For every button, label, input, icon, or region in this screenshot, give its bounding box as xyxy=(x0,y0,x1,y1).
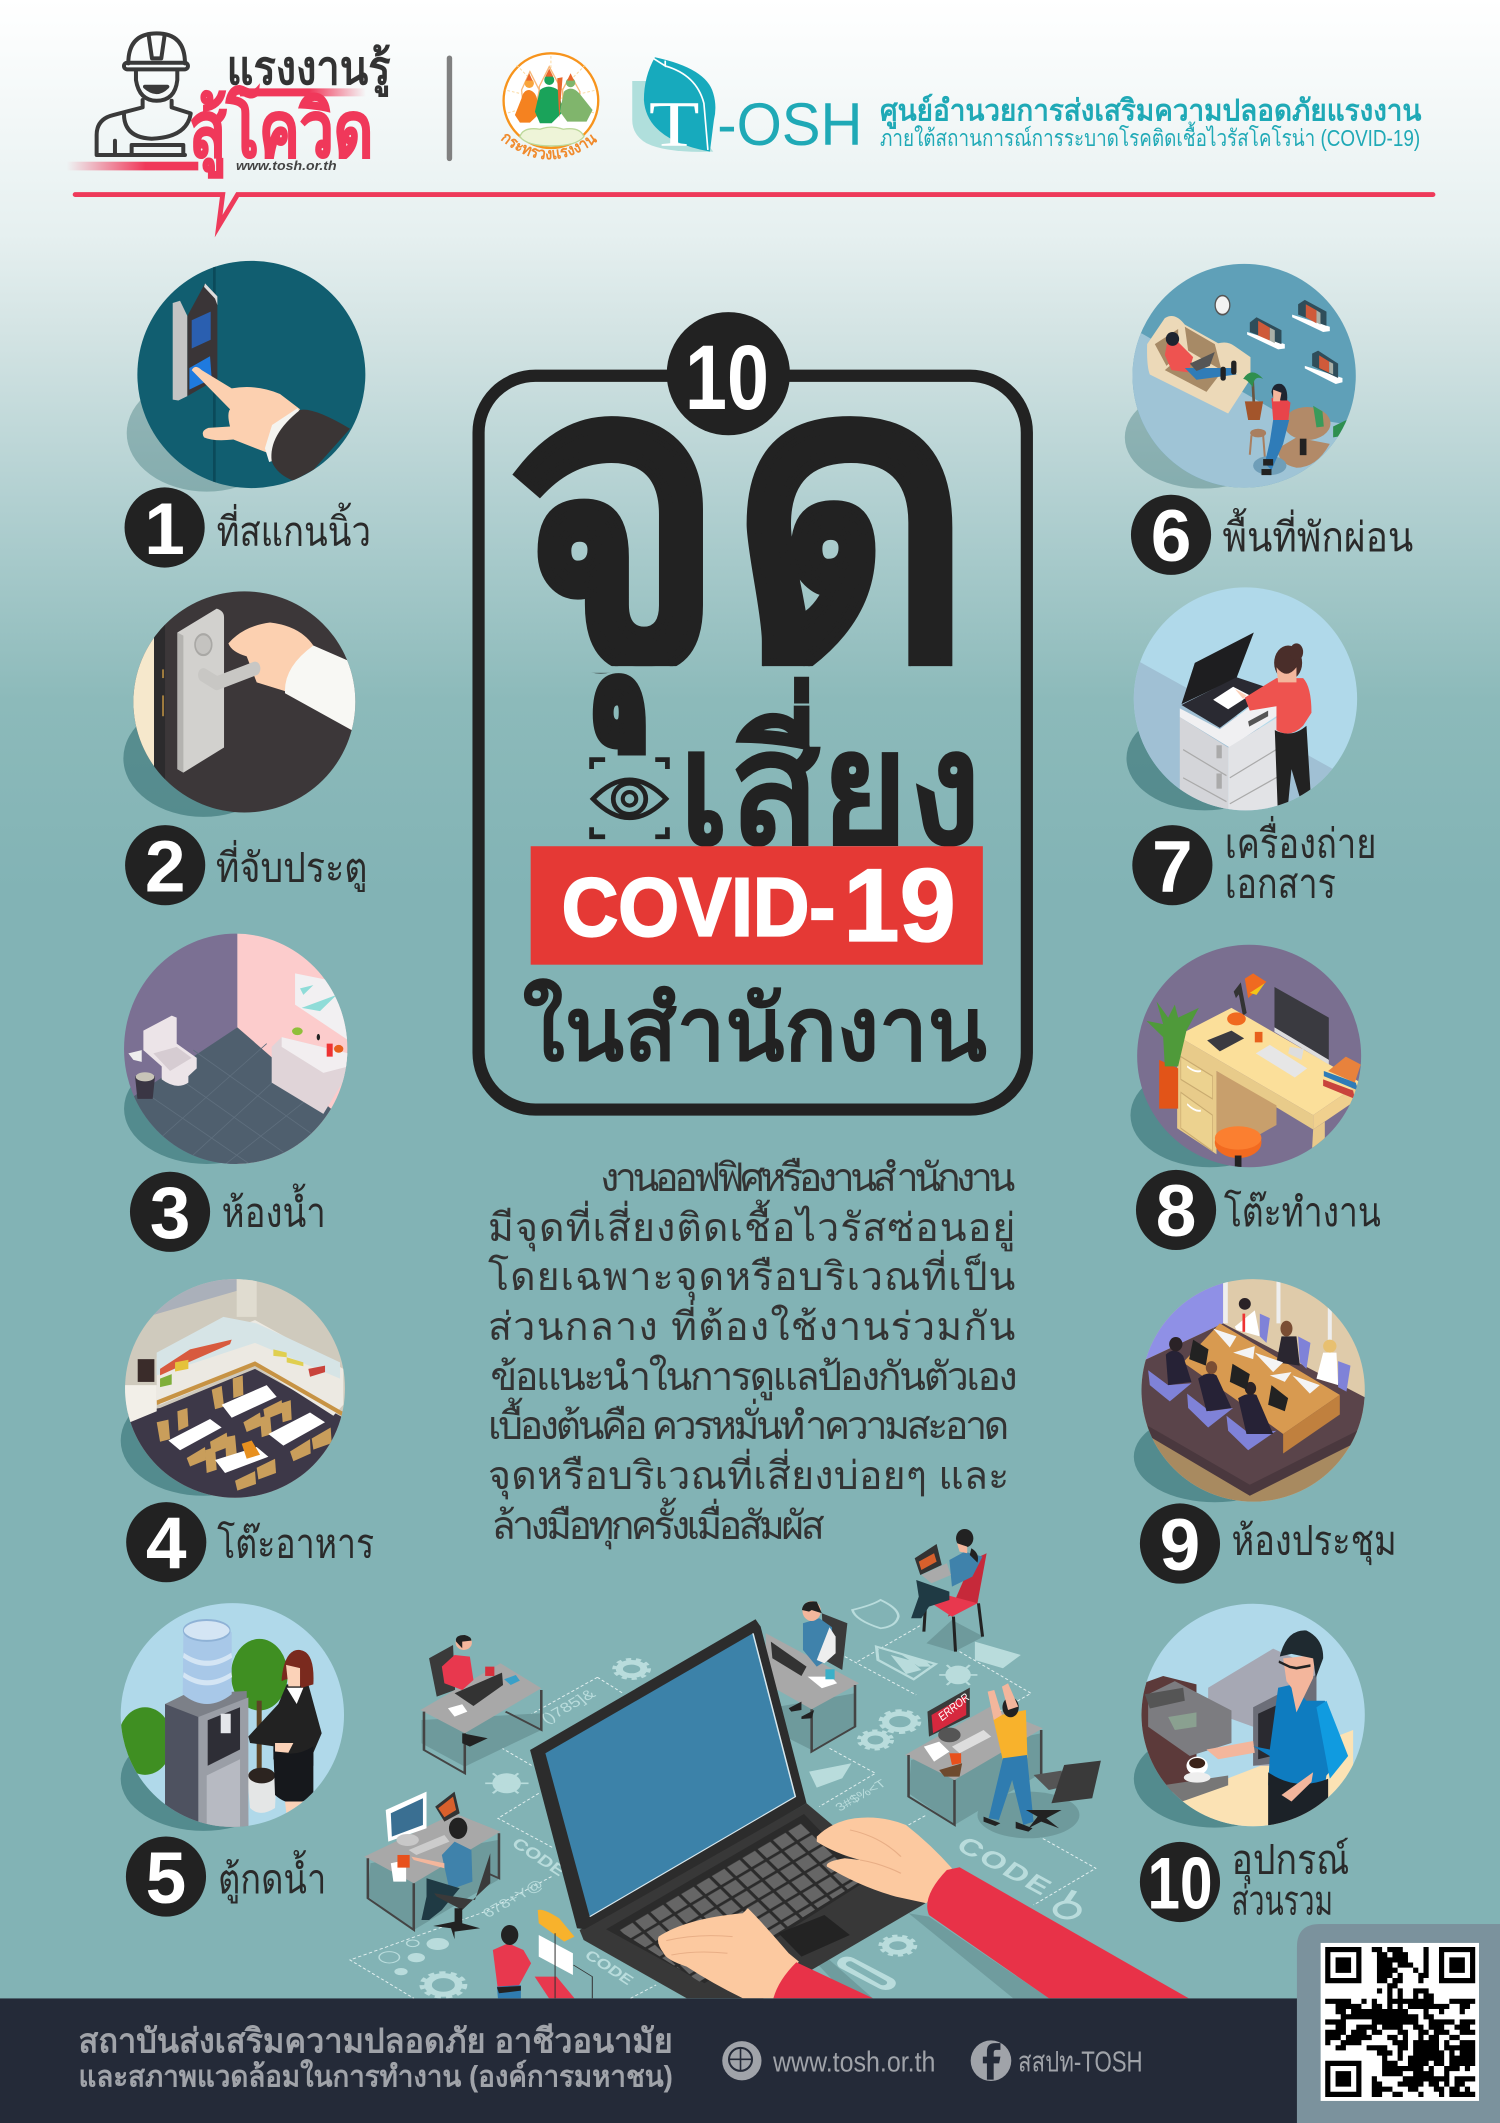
paragraph xyxy=(488,1156,1018,1550)
logo: T-OSH xyxy=(632,57,863,161)
number badge 6 xyxy=(1131,495,1211,577)
code texts xyxy=(480,1686,1057,1988)
logo: workers fight covid xyxy=(67,33,391,179)
big title: จุด xyxy=(512,416,952,756)
code texts: CODE xyxy=(581,1947,637,1988)
number badge 2 xyxy=(125,825,205,908)
code texts: 3#$%<T xyxy=(832,1777,889,1814)
desk worker: red chair xyxy=(911,1529,987,1652)
label 3: ห้องน้ำ xyxy=(222,1184,326,1236)
logo url: www.tosh.or.th xyxy=(236,159,337,173)
organisation name: และสภาพแวดล้อมในการทำงาน (องค์การมหาชน) xyxy=(79,2058,673,2093)
facebook name: สสปท-TOSH xyxy=(1018,2047,1143,2079)
icon: globe xyxy=(722,2041,762,2080)
shadow of arm xyxy=(817,1913,1049,1998)
label 10 xyxy=(1232,1836,1349,1923)
panel: 6 rest area xyxy=(1100,240,1420,577)
desk worker: error screen xyxy=(905,1683,1101,1838)
label 10: อุปกรณ์ xyxy=(1232,1836,1349,1884)
desk worker: red shirt xyxy=(420,1635,541,1773)
number badge 9: 9 xyxy=(1160,1505,1200,1586)
number badge 6: 6 xyxy=(1151,496,1191,577)
red speech line xyxy=(75,195,1433,226)
label 7: เอกสาร xyxy=(1225,860,1336,906)
panel: 2 door handle xyxy=(123,591,365,906)
illustration: photocopier xyxy=(1126,588,1358,810)
title: เสี่ยง: เสี่ยง xyxy=(678,677,981,878)
label 7: เครื่องถ่าย xyxy=(1225,816,1377,867)
red band COVID-19: COVID- xyxy=(562,862,835,954)
panel: 9 meeting room xyxy=(1134,1271,1397,1586)
laptop xyxy=(530,1619,925,1998)
title block xyxy=(479,278,1027,1110)
paragraph: ข้อแนะนำในการดูแลป้องกันตัวเอง xyxy=(490,1355,1018,1400)
footer bar xyxy=(0,1998,1300,2123)
organisation name: สถาบันส่งเสริมความปลอดภัย อาชีวอนามัย xyxy=(79,2023,673,2061)
circle number 10: 10 xyxy=(685,326,769,429)
QR panel xyxy=(1297,1924,1500,2123)
label 9: ห้องประชุม xyxy=(1232,1517,1397,1565)
label 8: โต๊ะทำงาน xyxy=(1224,1189,1381,1235)
panel: 10 shared appliances xyxy=(1134,1597,1373,1924)
illustration: door handle xyxy=(123,591,356,817)
paragraph: โดยเฉพาะจุดหรือบริเวณที่เป็น xyxy=(488,1249,1015,1301)
pale icons: gears, bug, mail, shield xyxy=(379,1600,1079,1997)
left hand xyxy=(658,1908,873,1998)
desk worker: error screen: ERROR xyxy=(937,1691,972,1724)
number badge 4 xyxy=(126,1502,206,1585)
number badge 7 xyxy=(1132,825,1212,908)
red band COVID-19 xyxy=(531,846,983,965)
title frame xyxy=(479,376,1027,1110)
big title: จุด: จุด xyxy=(505,278,975,783)
illustration: people coding around laptop xyxy=(350,1529,1189,1998)
paragraph: ล้างมือทุกครั้งเมื่อสัมผัส xyxy=(492,1497,825,1550)
emblem: ministry of labour: กระทรวงแรงงาน xyxy=(500,134,598,160)
number badge 8 xyxy=(1136,1170,1216,1252)
organisation name xyxy=(79,2023,673,2093)
illustration: rest area xyxy=(1124,264,1356,488)
red ribbon strips xyxy=(67,88,366,170)
icon: worker with helmet xyxy=(97,33,191,155)
number badge 1: 1 xyxy=(144,489,185,570)
header title line 1: ศูนย์อำนวยการส่งเสริมความปลอดภัยแรงงาน xyxy=(880,94,1422,130)
illustration: water dispenser xyxy=(120,1603,344,1831)
paragraph: จุดหรือบริเวณที่เสี่ยงบ่อยๆ และ xyxy=(488,1448,1009,1500)
code texts: CODE xyxy=(950,1832,1057,1900)
label 7 xyxy=(1225,816,1377,906)
icon: facebook xyxy=(971,2040,1011,2081)
icon: eye scan xyxy=(592,760,667,837)
divider xyxy=(447,56,452,161)
illustration: coffee machine xyxy=(1134,1597,1373,1837)
illustration: meeting room xyxy=(1134,1271,1373,1506)
emblem: ministry of labour xyxy=(500,52,600,160)
logo: T-OSH: -OSH xyxy=(717,90,863,158)
red band COVID-19: 19 xyxy=(843,848,956,964)
panel: 4 canteen tables xyxy=(120,1271,374,1585)
illustration: fingerprint scanner xyxy=(126,260,366,492)
paragraph: งานออฟฟิศหรืองานสำนักงาน xyxy=(600,1156,1015,1200)
label 6: พื้นที่พักผ่อน xyxy=(1222,508,1413,560)
code texts: 678+Y@ xyxy=(480,1877,547,1921)
panel: 5 water dispenser xyxy=(118,1597,353,1919)
number badge 3: 3 xyxy=(150,1173,190,1254)
number badge 1 xyxy=(125,487,205,570)
panel: 7 photocopier xyxy=(1100,578,1420,908)
logo: T-OSH: T xyxy=(649,89,700,161)
big title: จุด: จุ xyxy=(500,278,662,783)
title: ในสำนักงาน: ในสำนักงาน xyxy=(523,978,987,1079)
number badge 5: 5 xyxy=(146,1838,186,1919)
label 1: ที่สแกนนิ้ว xyxy=(217,503,371,555)
paragraph: เบื้องต้นคือ ควรหมั่นทำความสะอาด xyxy=(488,1397,1009,1448)
number badge 2: 2 xyxy=(145,827,185,908)
panel: 8 work desk xyxy=(1130,940,1381,1252)
illustration: toilet xyxy=(124,934,348,1164)
desk worker: headset xyxy=(766,1601,859,1752)
label 2: ที่จับประตู xyxy=(216,839,368,892)
QR code xyxy=(1325,1947,1475,2097)
panel: 1 fingerprint scanner xyxy=(124,260,368,568)
panel: 3 toilet xyxy=(120,920,354,1254)
number badge 5 xyxy=(126,1837,206,1919)
website: www.tosh.or.th xyxy=(772,2047,935,2079)
circle number 10 xyxy=(667,312,790,435)
code texts: ()785]& xyxy=(538,1686,599,1727)
code texts: CODE xyxy=(508,1834,570,1879)
number badge 7: 7 xyxy=(1152,827,1193,908)
label 10: ส่วนรวม xyxy=(1232,1877,1333,1923)
illustration: work desk xyxy=(1130,940,1366,1180)
presenter xyxy=(493,1910,592,1998)
number badge 9 xyxy=(1140,1503,1220,1586)
illustration: canteen xyxy=(120,1279,345,1498)
desk worker: blue shirt xyxy=(364,1792,500,1939)
paragraph: ส่วนกลาง ที่ต้องใช้งานร่วมกัน xyxy=(488,1299,1015,1349)
label 4: โต๊ะอาหาร xyxy=(217,1521,374,1567)
logo line 2: สู้โควิด xyxy=(189,85,373,179)
number badge 4: 4 xyxy=(146,1504,187,1585)
paragraph: มีจุดที่เสี่ยงติดเชื้อไวรัสซ่อนอยู่ xyxy=(488,1199,1015,1252)
number badge 10: 10 xyxy=(1147,1843,1212,1924)
logo line 1: แรงงานรู้ xyxy=(227,42,391,97)
number badge 3 xyxy=(130,1172,210,1254)
network dashed paths xyxy=(350,1625,1096,1998)
label 5: ตู้กดน้ำ xyxy=(218,1850,326,1904)
right hand xyxy=(817,1817,1189,1998)
header xyxy=(70,31,1436,238)
number badge 8: 8 xyxy=(1156,1171,1196,1252)
